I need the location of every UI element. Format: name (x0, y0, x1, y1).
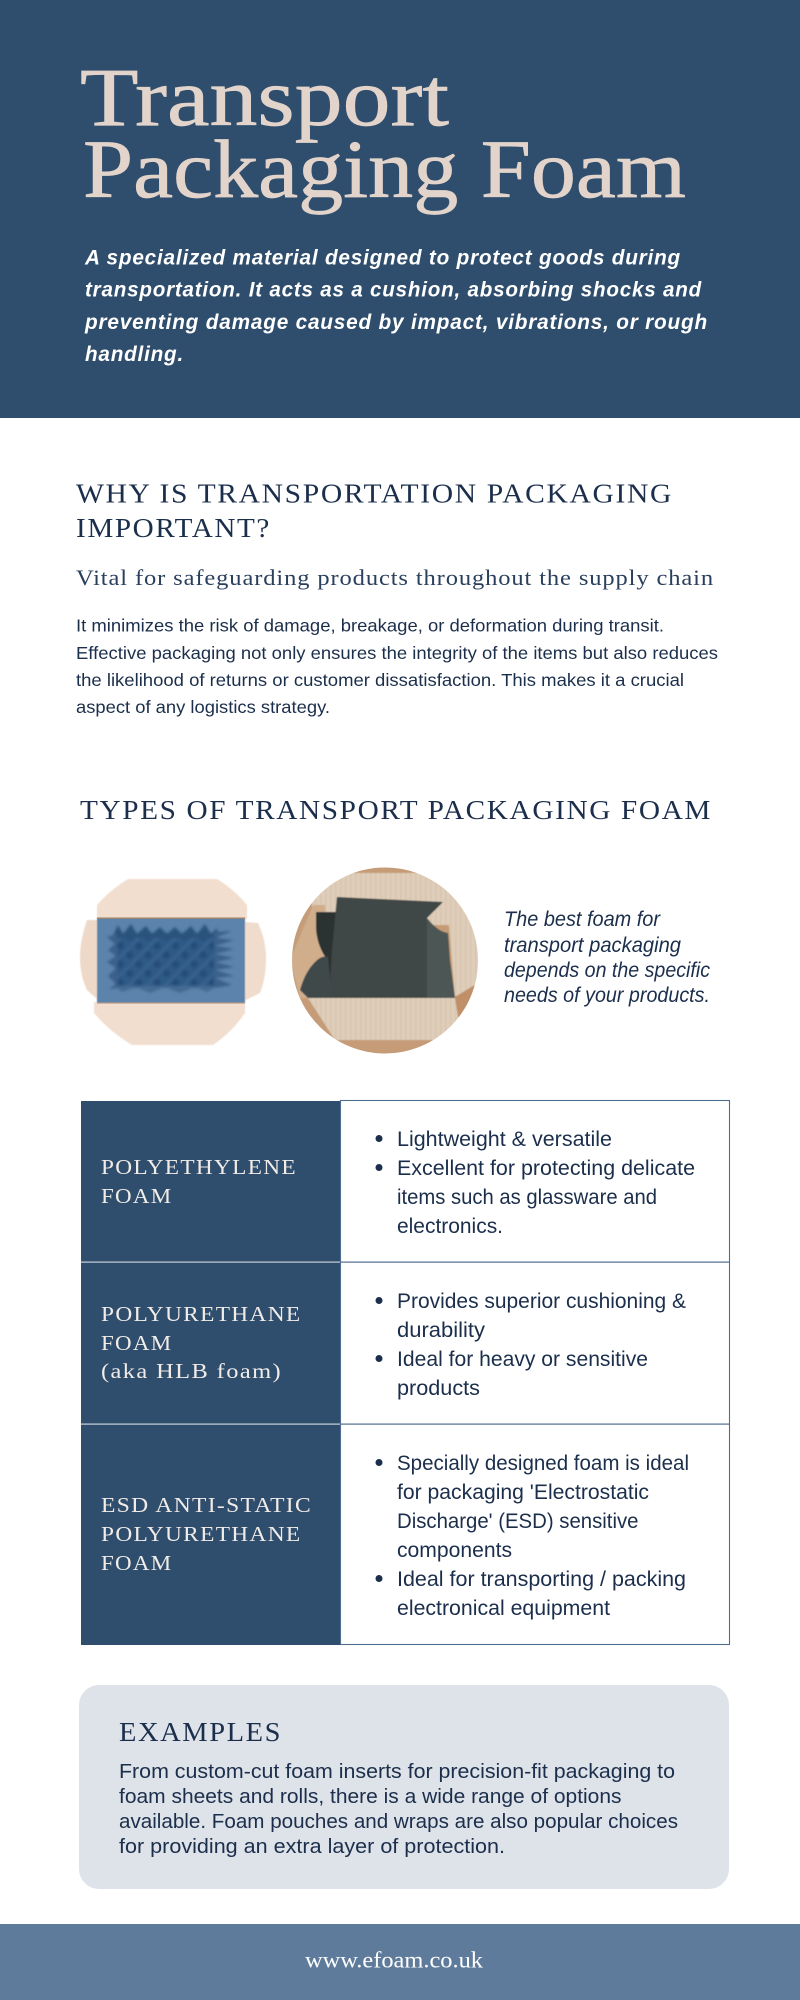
row 2 bullets: durability (397, 1319, 486, 1342)
row 2 bullets (376, 1290, 686, 1400)
row 1: polyethylene (101, 1128, 695, 1238)
row 3 bullets: Specially designed foam is ideal (397, 1452, 689, 1475)
row 3 label (101, 1493, 312, 1575)
header description (84, 246, 708, 366)
row 1 bullets: Lightweight & versatile (397, 1128, 612, 1151)
header description: preventing damage caused by impact, vibrations, or rough (84, 311, 708, 334)
section heading: IMPORTANT? (76, 513, 271, 543)
row 1 label: FOAM (101, 1184, 172, 1208)
title: Transport (80, 51, 449, 143)
row 2 label: POLYURETHANE (101, 1302, 302, 1326)
callout: best foam note: depends on the specific (504, 959, 710, 982)
row 3 bullets: components (397, 1539, 512, 1562)
row 3 bullets (376, 1452, 689, 1620)
callout: best foam note: transport packaging (504, 934, 681, 957)
row 2 label: FOAM (101, 1331, 172, 1355)
header description: A specialized material designed to protect goods during (84, 246, 681, 270)
types heading: TYPES OF TRANSPORT PACKAGING FOAM (80, 795, 712, 825)
examples heading: EXAMPLES (119, 1717, 282, 1747)
examples body: foam sheets and rolls, there is a wide range of options (119, 1785, 622, 1808)
callout: best foam note: The best foam for (504, 908, 661, 931)
row 1 bullets: electronics. (397, 1215, 503, 1238)
footer bar (0, 1924, 800, 2000)
section heading (76, 478, 673, 543)
callout: best foam note: needs of your products. (504, 984, 710, 1007)
subheading: Vital for safeguarding products throughout the supply chain (76, 565, 714, 590)
row 3 label: POLYURETHANE (101, 1522, 302, 1546)
row 1 label: POLYETHYLENE (101, 1155, 297, 1179)
section heading: WHY IS TRANSPORTATION PACKAGING (76, 478, 673, 508)
examples body: From custom-cut foam inserts for precision-fit packaging to (119, 1760, 675, 1783)
header description: transportation. It acts as a cushion, absorbing shocks and (85, 278, 702, 302)
image: box with dark foam sheet (290, 866, 480, 1056)
table: foam types (81, 1100, 730, 1645)
row 2 bullets: Provides superior cushioning & (397, 1290, 686, 1313)
row 2: polyurethane (101, 1290, 686, 1400)
callout: best foam note (504, 908, 710, 1007)
row 3 bullets: electronical equipment (397, 1597, 610, 1620)
row 1 bullets: Excellent for protecting delicate (397, 1157, 695, 1180)
row 2 label: (aka HLB foam) (101, 1359, 282, 1383)
row 3: ESD anti-static (101, 1452, 689, 1620)
body text: Effective packaging not only ensures the integrity of the items but also reduces (76, 643, 718, 663)
section: why important (76, 478, 718, 717)
body text: the likelihood of returns or customer dissatisfaction. This makes it a crucial (76, 670, 684, 690)
panel: examples (79, 1685, 729, 1889)
image: box with blue egg-crate foam (80, 879, 266, 1045)
row 2 bullets: products (397, 1377, 480, 1400)
title: Packaging Foam (83, 123, 686, 215)
row 3 bullets: for packaging 'Electrostatic (397, 1481, 649, 1504)
header description: handling. (85, 343, 184, 366)
body text (76, 616, 718, 717)
row 1 bullets: items such as glassware and (397, 1186, 657, 1209)
body text: It minimizes the risk of damage, breakage, or deformation during transit. (76, 616, 664, 636)
website url: www.efoam.co.uk (305, 1948, 484, 1972)
row 1 bullets (376, 1128, 695, 1238)
row 1 label (101, 1155, 297, 1208)
examples body (119, 1760, 678, 1858)
examples body: available. Foam pouches and wraps are also popular choices (119, 1810, 678, 1833)
body text: aspect of any logistics strategy. (76, 697, 330, 717)
row 3 bullets: Ideal for transporting / packing (397, 1568, 686, 1591)
row 3 bullets: Discharge' (ESD) sensitive (397, 1510, 638, 1533)
row 2 bullets: Ideal for heavy or sensitive (397, 1348, 648, 1371)
row 3 label: ESD ANTI-STATIC (101, 1493, 312, 1517)
examples body: for providing an extra layer of protection. (119, 1835, 505, 1858)
header panel (0, 0, 800, 418)
row 3 label: FOAM (101, 1551, 172, 1575)
title (80, 51, 686, 215)
row 2 label (101, 1302, 302, 1383)
